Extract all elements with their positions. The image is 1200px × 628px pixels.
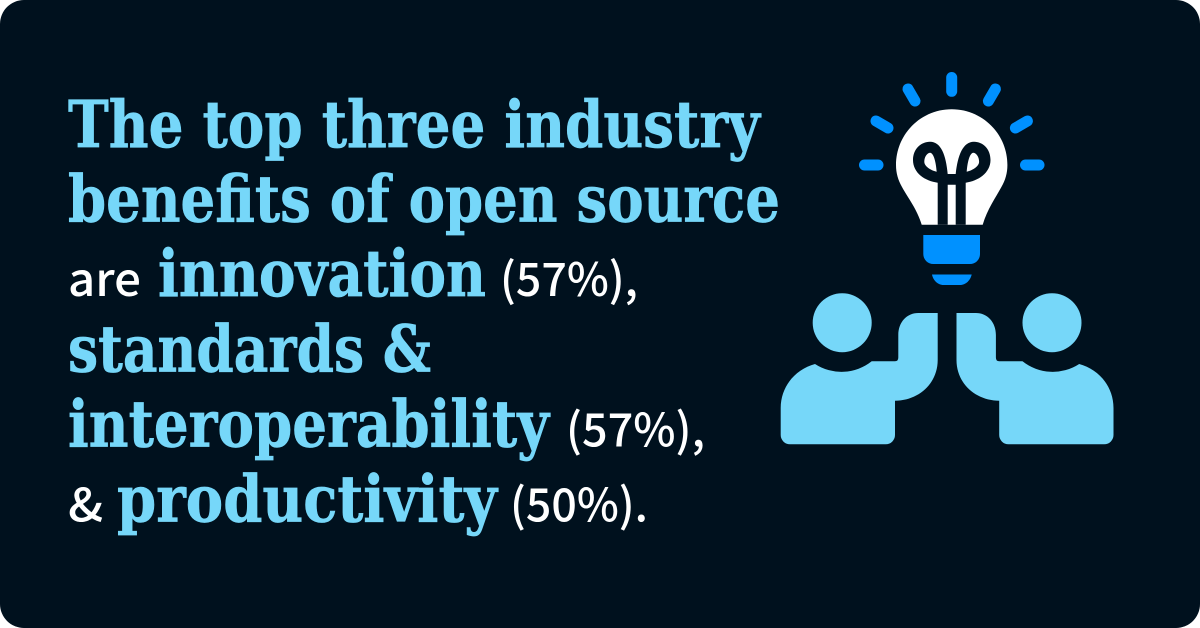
text block: innovation statistic: (57%), [500, 244, 638, 310]
icon: light bulb glass [896, 109, 1007, 225]
text block: standards and interoperability statistic: interoperability [68, 386, 551, 462]
text block: productivity statistic: (50%). [510, 470, 648, 536]
text block: innovation statistic: are [68, 244, 141, 310]
heading: top three industry benefits: The top three industry [68, 87, 762, 163]
heading: top three industry benefits: benefits of open source [68, 162, 780, 238]
heading: top three industry benefits [68, 87, 780, 238]
text block: standards and interoperability statistic [68, 312, 705, 462]
icon: right person raising hand [956, 293, 1114, 444]
icon: bulb base [923, 235, 980, 285]
text block: innovation statistic [68, 236, 638, 312]
text block: innovation statistic: innovation [158, 236, 486, 312]
text block: standards and interoperability statistic: standards & [68, 312, 431, 388]
icon: left person raising hand [781, 293, 938, 444]
text block: productivity statistic: & [68, 470, 103, 536]
text block: productivity statistic: productivity [117, 462, 499, 538]
icon: light rays [864, 78, 1039, 165]
text block: standards and interoperability statistic: (57%), [566, 394, 705, 460]
